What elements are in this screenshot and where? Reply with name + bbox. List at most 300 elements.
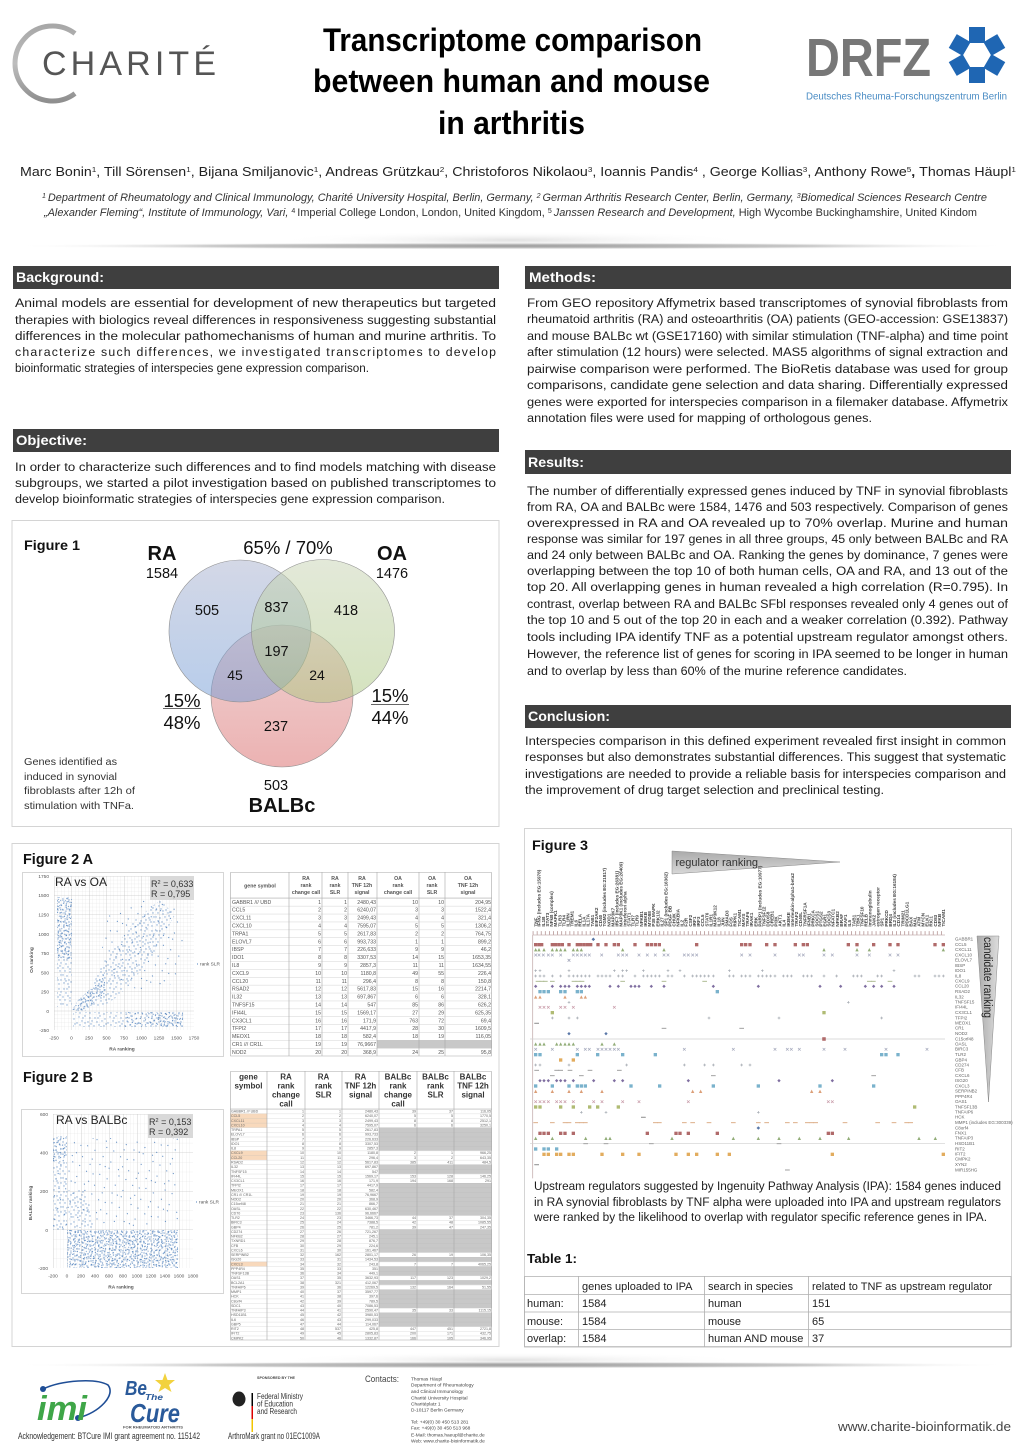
table: figure 2 B: call xyxy=(279,1100,293,1108)
table: figure 2 A: 16 xyxy=(341,1018,347,1024)
table: figure 2 B: 484,5 xyxy=(482,1160,491,1164)
logo: DRFZ: DRFZ xyxy=(806,28,931,88)
table: figure 2 B: 321 xyxy=(335,1281,341,1285)
table: figure 2 A: 3 xyxy=(344,916,347,922)
table: figure 2 B: 11 xyxy=(337,1156,341,1160)
table: figure 2 B: BIRC3 xyxy=(231,1221,242,1225)
text block: results: response was similar for 197 genes in all three groups, 45 only between BALBc and RA xyxy=(527,532,1009,546)
table: figure 2 B: 18 xyxy=(337,1188,341,1192)
table: figure 2 A: 7595,07 xyxy=(357,924,376,930)
table: figure 2 A: 18 xyxy=(341,1034,347,1040)
chart: RA vs OA scatter xyxy=(22,872,224,1056)
table: figure 2 B: 368,9 xyxy=(369,1198,378,1202)
regulator labels: RELB xyxy=(863,913,868,927)
table: figure 2 A: 8 xyxy=(415,979,418,985)
table: figure 2 A: 697,867 xyxy=(357,995,376,1001)
label: RA vs BALBc: RA vs BALBc xyxy=(56,1113,127,1127)
icon: DRFZ blue star xyxy=(949,27,1005,83)
table: figure 2 A: rank xyxy=(301,883,312,889)
table: figure 2 B: 2590,47 xyxy=(365,1309,378,1313)
table: figure 2 B: 48 xyxy=(300,1327,304,1331)
table: figure 2 B: change xyxy=(384,1090,413,1100)
table: figure 2 A: signal xyxy=(460,890,476,896)
table: figure 2 A: 116,05 xyxy=(476,1034,491,1040)
authors: 3 xyxy=(803,165,807,174)
table: figure 2 A: 14 xyxy=(341,1002,347,1008)
logo: Federal Ministry of Education and Research: and Research xyxy=(257,1407,297,1416)
table: figure 2 B: 7 xyxy=(414,1262,416,1266)
regulator labels: IL2 (includes EG:16184) xyxy=(892,874,897,927)
text block: results: overlapping between the top 10 of both human cells, OA and RA, and 13 out of the xyxy=(527,564,1008,578)
regulator labels: PARP1 (includes EG:10977) xyxy=(757,865,762,927)
table: figure 2 A: 1306,2 xyxy=(475,924,491,930)
table: figure 2 A: change call xyxy=(384,890,413,896)
arrow: candidate ranking xyxy=(977,936,999,1102)
table: figure 2 A: RA xyxy=(302,876,310,882)
table: figure 2 B: 171 xyxy=(447,1332,453,1336)
venn labels: 24 xyxy=(309,667,325,683)
table: figure 2 A: GABBR1 /// UBD xyxy=(232,900,271,906)
table: figure 2 B: 19 xyxy=(300,1193,304,1197)
regulator labels: MAP3K7 xyxy=(610,907,615,927)
table: figure 2 A: 9 xyxy=(318,963,321,969)
table: figure 2 A: CR1 /// CR1L xyxy=(232,1042,263,1048)
heading: objective: Objective: xyxy=(16,433,87,448)
table: figure 2 A: 18 xyxy=(315,1034,321,1040)
regulator labels: IL1R1 xyxy=(708,914,713,927)
table: figure 2 A: 14 xyxy=(412,955,418,961)
regulator labels: IFNG (includes EG:15978) xyxy=(537,869,542,927)
table: figure 2 B: 146,25 xyxy=(480,1174,491,1178)
table: figure 2 B: OASL xyxy=(231,1207,241,1211)
candidate gene labels: TNFAIP3 xyxy=(955,1136,974,1141)
callout: correlation xyxy=(150,876,194,900)
table: figure 2 B: 19 xyxy=(337,1193,341,1197)
table: figure 2 B: rank xyxy=(278,1082,295,1090)
table: figure 2 B: NOD2 xyxy=(231,1198,241,1202)
authors: , Anthony Rowe xyxy=(807,164,907,179)
regulator labels: IL1RN xyxy=(565,913,570,927)
table: figure 2 B: 28 xyxy=(337,1239,341,1243)
table: figure 2 B: CXCL10 xyxy=(231,1124,245,1128)
text block: background xyxy=(15,296,496,375)
table: figure 2 B: 22 xyxy=(337,1207,341,1211)
table: figure 2 A: 899,2 xyxy=(478,939,491,945)
table: figure 2 A: 3 xyxy=(441,908,444,914)
table: figure 2 B: 23 xyxy=(337,1216,341,1220)
table: figure 2 B: 40 xyxy=(337,1304,341,1308)
axis labels: 1400 xyxy=(160,1274,171,1280)
table: figure 2 B: 200 xyxy=(410,1332,416,1336)
table: figure 2 A: 72 xyxy=(438,1018,444,1024)
table 1: mouse: xyxy=(527,1316,563,1328)
table: figure 2 B: 385 xyxy=(410,1160,416,1164)
table: figure 2 B: 39 xyxy=(337,1299,341,1303)
table: figure 2 A: 12 xyxy=(341,987,347,993)
table: figure 2 A: 4 xyxy=(415,916,418,922)
table: figure 2 B: 117 xyxy=(410,1276,416,1280)
heading: background: Background: xyxy=(16,270,104,285)
venn labels: 1584 xyxy=(146,566,178,582)
affiliations: Biomedical Sciences Research Centre xyxy=(801,192,987,204)
chart: regulator by candidate matrix xyxy=(530,862,1013,1178)
table 1: 65 xyxy=(812,1316,824,1328)
table: figure 2 B: 24 xyxy=(300,1216,304,1220)
panel: conclusion xyxy=(525,705,1011,797)
caption: figure 3: Upstream regulators suggested by Ingenuity Pathway Analysis (IPA): 1584 genes induced xyxy=(534,1179,1001,1193)
heading: figure 2 A: Figure 2 A xyxy=(23,851,93,868)
regulator labels: MAVS xyxy=(741,914,746,927)
table: figure 2 B: 27 xyxy=(337,1234,341,1238)
affiliations: 3 xyxy=(797,193,801,200)
table: figure 2 B: 1029,2 xyxy=(480,1276,491,1280)
table: figure 2 B: 47 xyxy=(449,1225,453,1229)
regulator labels: IL6 xyxy=(574,920,579,927)
regulator labels: TICAM1 xyxy=(737,909,742,927)
table: figure 2 A: NOD2 xyxy=(232,1050,247,1056)
table: figure 2 B: 76,9667 xyxy=(365,1193,378,1197)
regulator labels: TRIM21 xyxy=(900,910,905,927)
axis labels: 250 xyxy=(41,990,49,996)
regulator labels: NFKB2 xyxy=(835,911,840,927)
table: figure 2 B: C8orf4 xyxy=(231,1299,242,1303)
text block: background: bioinformatic strategies of interspecies gene expression comparison. xyxy=(15,361,369,375)
candidate gene labels: CMPK2 xyxy=(955,1157,971,1162)
candidate gene labels: IFIT2 xyxy=(955,1152,966,1157)
table: figure 2 A: 15 xyxy=(315,1010,321,1016)
axis labels: 1000 xyxy=(132,1274,143,1280)
candidate gene labels: CCL5 xyxy=(955,942,967,947)
table: figure 2 B: 33 xyxy=(337,1267,341,1271)
table: figure 2 B: 6 xyxy=(339,1133,341,1137)
table: figure 2 B: signal xyxy=(349,1090,372,1100)
table 1: 1584 xyxy=(582,1333,606,1345)
table: figure 2 B: 14 xyxy=(337,1170,341,1174)
table: figure 2 B: 25 xyxy=(300,1221,304,1225)
table: figure 2 A: 1569,17 xyxy=(357,1010,376,1016)
table: figure 2 A: 11 xyxy=(439,963,444,969)
table: figure 2 B: 39 xyxy=(300,1285,304,1289)
regulator labels: TBK1 xyxy=(855,914,860,927)
regulator labels: TREM1 xyxy=(569,910,574,927)
table: figure 2 B: 24 xyxy=(337,1221,341,1225)
regulator labels: P38 MAPK xyxy=(651,903,656,927)
regulator labels: CCL5 xyxy=(700,914,705,927)
affiliations: High Wycombe Buckinghamshire, United Kindom xyxy=(739,207,977,219)
venn labels: 44% xyxy=(371,707,409,728)
text: acknowledgement: Acknowledgement: BTCure IMI grant agreement no. 115142 xyxy=(18,1431,200,1441)
regulator labels: TNFSF10 xyxy=(859,906,864,927)
table: figure 2 A: 3 xyxy=(318,916,321,922)
table: figure 2 A: 993,733 xyxy=(357,939,376,945)
table: figure 2 B: 48 xyxy=(449,1221,453,1225)
heading: figure 2 B: Figure 2 B xyxy=(23,1069,93,1086)
table: figure 2 B: CXCL9 xyxy=(231,1151,243,1155)
table: figure 2 A: 4 xyxy=(344,924,347,930)
table: figure 2 B: 2480,43 xyxy=(365,1110,378,1114)
regulator labels: PI3K xyxy=(774,916,779,927)
axis labels xyxy=(29,874,221,1052)
heading: methods xyxy=(525,266,1011,289)
authors: 4 xyxy=(693,165,698,174)
table: figure 2 A: TNF 12h xyxy=(458,883,478,889)
table: figure 2 B: 397,6 xyxy=(369,1295,378,1299)
regulator labels: JAK2 xyxy=(872,914,877,927)
axis labels: rank SLR xyxy=(200,962,221,968)
table: figure 2 B: 2801,17 xyxy=(365,1253,378,1257)
table: figure 2 B: 11 xyxy=(300,1156,304,1160)
text: contacts: Charité University Hospital xyxy=(411,1396,468,1402)
table: figure 2 B: 106,35 xyxy=(480,1253,491,1257)
regulator labels: MAP3K12 xyxy=(712,905,717,927)
venn labels: 837 xyxy=(264,600,289,616)
text: contacts: Thomas Häupl xyxy=(411,1376,442,1382)
text block: objective: develop bioinformatic strategies of interspecies gene expression comparison. xyxy=(15,492,445,506)
table: figure 2 B: 299,033 xyxy=(365,1318,378,1322)
authors: 1 xyxy=(92,165,96,174)
candidate gene labels: MEOX1 xyxy=(955,1021,971,1026)
candidate gene labels: TNFSF13B xyxy=(955,1104,977,1109)
table: figure 2 A: RA xyxy=(331,876,339,882)
table: figure 2 B: 245,1 xyxy=(369,1234,378,1238)
table: figure 2 B: 291 xyxy=(485,1179,491,1183)
table: figure 2 A: IL8 xyxy=(232,963,239,969)
table: figure 2 A: 15 xyxy=(341,1010,347,1016)
logo: Charité: CHARITÉ xyxy=(42,45,216,83)
table: figure 2 B: 2 xyxy=(339,1114,341,1118)
arrow: regulator ranking xyxy=(672,851,840,874)
affiliations: 2 xyxy=(536,193,543,200)
table: figure 2 B: TFPI2 xyxy=(231,1184,241,1188)
callout: correlation: = 0,153 xyxy=(159,1117,191,1127)
table: figure 2 A: 1634,55 xyxy=(472,963,491,969)
table: figure 2 B: CCL5 xyxy=(231,1114,240,1118)
candidate gene labels: CX3CL1 xyxy=(955,1010,972,1015)
candidate gene labels: IDO1 xyxy=(955,968,966,973)
regulator labels: IL18 xyxy=(716,917,721,927)
table: figure 2 B: RA xyxy=(280,1072,292,1082)
axis labels: rank SLR xyxy=(199,1200,220,1206)
table: figure 2 B: 132 xyxy=(410,1285,416,1289)
table: figure 2 B: 35 xyxy=(337,1276,341,1280)
candidate gene labels: CXCL3 xyxy=(955,1083,970,1088)
table: figure 2 A: 764,75 xyxy=(475,931,491,937)
regulator labels: SP1 xyxy=(880,917,885,927)
table: figure 2 B: TLR2 xyxy=(231,1216,240,1220)
table: figure 2 B: 1332,87 xyxy=(365,1336,378,1340)
table: figure 2 A: 25 xyxy=(438,1050,444,1056)
candidate gene labels: TNFSF15 xyxy=(955,1000,975,1005)
table: figure 2 B: 32 xyxy=(337,1262,341,1266)
table: figure 2 B: 43 xyxy=(337,1318,341,1322)
table: figure 2 A: OA xyxy=(464,876,472,882)
axis labels: -200 xyxy=(48,1274,58,1280)
regulator labels: TAB1 xyxy=(590,914,595,927)
axis labels: 200 xyxy=(40,1189,48,1195)
text block: conclusion: Interspecies comparison in this defined experiment revealed first insight in common xyxy=(525,734,1006,748)
axis labels: 600 xyxy=(105,1274,113,1280)
table: figure 2 A: 7 xyxy=(344,947,347,953)
regulator labels: IL2 xyxy=(680,920,685,927)
text block: background: therapies with biologics reveal differences in responsiveness suggesting substantial xyxy=(15,313,496,327)
table: figure 2 B: 8 xyxy=(339,1142,341,1146)
regulator labels: TLR3 xyxy=(557,915,562,927)
table: figure 2 B: 243,8 xyxy=(369,1262,378,1266)
table: figure 2 B: RSAD2 xyxy=(231,1160,243,1164)
candidate gene labels: HSD11B1 xyxy=(955,1141,975,1146)
regulator labels: IL1B xyxy=(541,916,546,927)
table: figure 2 A: 20 xyxy=(315,1050,321,1056)
venn labels: 15% xyxy=(371,685,409,706)
table: figure 2 B: 9 xyxy=(302,1147,304,1151)
candidate gene labels: NOD2 xyxy=(955,1031,968,1036)
caption: figure 3: were ranked by the likelihood to overlap with regulator specific reference genes in IPA. xyxy=(533,1210,987,1224)
table: figure 2 A: OA xyxy=(394,876,402,882)
regulator labels: Interferon alpha xyxy=(623,891,628,927)
panel: methods xyxy=(525,266,1011,425)
table: figure 2 A: 15 xyxy=(412,987,418,993)
text block: results: tools including IPA identify TNF as a potential upstream regulator amongst others. xyxy=(527,630,1008,644)
table: figure 2 A: 547 xyxy=(367,1002,376,1008)
text: contacts xyxy=(365,1374,485,1444)
table: figure 2 B: 27 xyxy=(300,1230,304,1234)
regulator labels: SP1 (includes EG:16362) xyxy=(663,872,668,927)
table: figure 2 B: 2512,1 xyxy=(480,1119,491,1123)
candidate gene labels: C8orf4 xyxy=(955,1125,969,1130)
table: figure 2 B: BCL2A1 xyxy=(231,1281,244,1285)
text: contacts: Department of Rheumatology xyxy=(411,1382,474,1388)
table: figure 2 A: 27 xyxy=(412,1010,418,1016)
regulator labels: MAP3K1 (includes EG:26409) xyxy=(618,862,623,927)
table: figure 2 B: 42 xyxy=(300,1299,304,1303)
regulator labels: IRF1 xyxy=(692,916,697,927)
table: figure 2 B: change xyxy=(272,1090,301,1100)
regulator labels: SMAD3 xyxy=(725,910,730,927)
regulator labels: BAX xyxy=(908,916,913,927)
table: figure 2 B: 37 xyxy=(300,1276,304,1280)
table: figure 2 B: 136 xyxy=(335,1211,341,1215)
candidate gene labels: OASL xyxy=(955,1041,967,1046)
text: ArthroMark grant: ArthroMark grant no 01EC1009A xyxy=(228,1431,320,1441)
table: figure 2 B: CXCL11 xyxy=(231,1119,244,1123)
table: figure 2 B: 411 xyxy=(447,1160,453,1164)
table: figure 2 B: 29 xyxy=(337,1244,341,1248)
table: figure 2 A: 17 xyxy=(341,1026,347,1032)
table: figure 2 A: 2857,3 xyxy=(360,963,376,969)
regulator labels: PRKCD xyxy=(884,909,889,927)
candidate gene labels: CFB xyxy=(955,1068,964,1073)
axis labels: 1750 xyxy=(189,1036,200,1042)
table: figure 2 A: 1 xyxy=(441,939,444,945)
table: figure 2 A: 13 xyxy=(341,995,347,1001)
table: figure 2 B: 2 xyxy=(302,1114,304,1118)
regulator labels: IRF7 (includes EG:26381) xyxy=(614,870,619,927)
table: figure 2 A: 171,9 xyxy=(363,1018,376,1024)
table: figure 2 A: 17 xyxy=(315,1026,321,1032)
table: figure 2 B: 50 xyxy=(300,1336,304,1340)
text block: results: The number of differentially expressed genes induced by TNF in synovial fibroblasts xyxy=(527,484,1008,498)
callout: correlation xyxy=(148,1114,193,1138)
text block: results: top 20. All overlapping genes in human revealed a high correlation (R=0.795). In xyxy=(527,580,1008,594)
venn labels: BALBc xyxy=(249,795,315,817)
axis labels: 1200 xyxy=(146,1274,157,1280)
table: figure 2 B: 28 xyxy=(300,1234,304,1238)
heading: table 1: Table 1: xyxy=(527,1251,577,1266)
table: figure 2 B: 35 xyxy=(412,1309,416,1313)
text: contacts: E-Mail: thomas.haeupl@charite.de xyxy=(411,1432,485,1438)
table: figure 2 B: TNFAIP3 xyxy=(231,1309,246,1313)
table: figure 2 A: 368,9 xyxy=(363,1050,376,1056)
candidate gene labels xyxy=(955,937,1013,1172)
table: figure 2 A: IBSP xyxy=(232,947,244,953)
table: figure 2 A: 55 xyxy=(438,971,444,977)
table: figure 2 A xyxy=(230,872,492,1056)
text block: methods: pairwise comparison were performed. The BioRetis database was used for group xyxy=(527,362,1008,376)
table: figure 2 B: 4417,9 xyxy=(367,1184,378,1188)
regulator labels: NFKB xyxy=(937,913,942,927)
regulator labels: RAF1 xyxy=(843,914,848,927)
text block: results: However, the reference list of genes for scoring in IPA seemed to be longer in human xyxy=(527,647,1008,661)
logo: Charité xyxy=(15,26,216,101)
table: figure 2 B: 23 xyxy=(300,1211,304,1215)
regulator labels: STAT1 xyxy=(627,912,632,927)
table: figure 2 B: 5 xyxy=(339,1128,341,1132)
candidate gene labels: MIR155HG xyxy=(955,1167,978,1172)
table: figure 2 A: 2480,43 xyxy=(357,900,376,906)
table: figure 2 A: 5617,83 xyxy=(357,987,376,993)
table: figure 2 B: 6 xyxy=(451,1124,453,1128)
callout: correlation: R xyxy=(149,1117,156,1127)
table: figure 2 B: 40 xyxy=(300,1290,304,1294)
table: figure 2 B: 447 xyxy=(410,1327,416,1331)
table: figure 2 A: 321,4 xyxy=(478,916,491,922)
table: figure 2 B: 547 xyxy=(372,1170,378,1174)
table: figure 2 B: 36 xyxy=(337,1285,341,1289)
table: figure 2 B: 866,7 xyxy=(369,1202,378,1206)
authors: , Andreas Grützkau xyxy=(318,164,440,179)
table: figure 2 A: 9 xyxy=(415,947,418,953)
regulator labels: TLR9 xyxy=(635,915,640,927)
table: figure 2 A: ELOVL7 xyxy=(232,939,252,945)
table: figure 2 B: SLR xyxy=(428,1090,444,1100)
table: figure 2 B: 1434,53 xyxy=(365,1258,378,1262)
table: figure 2 A: 6 xyxy=(344,939,347,945)
candidate gene labels: IBSP xyxy=(955,963,965,968)
table: figure 2 A: 28 xyxy=(412,1026,418,1032)
regulator labels: NFkB (complex) xyxy=(549,891,554,927)
venn labels xyxy=(146,537,409,817)
table: figure 2 B: 162 xyxy=(335,1253,341,1257)
venn labels: 1476 xyxy=(376,566,408,582)
table: figure 2 A: 1653,35 xyxy=(472,955,491,961)
table: figure 2 B: 33 xyxy=(300,1258,304,1262)
logo: Federal Ministry of Education and Research: SPONSORED BY THE xyxy=(257,1375,295,1380)
regulator labels: CHUK xyxy=(672,913,677,927)
table: figure 2 B: 993,733 xyxy=(365,1133,378,1137)
affiliations: Janssen Research and Development, xyxy=(553,207,739,219)
table: figure 2 A: 4 xyxy=(441,916,444,922)
chart: RA vs BALBc scatter xyxy=(22,1110,224,1294)
venn labels: 15% xyxy=(163,690,201,711)
table: figure 2 A: 13 xyxy=(315,995,321,1001)
table: figure 2 B: SDC1 xyxy=(231,1304,241,1308)
table: figure 2 B: 41 xyxy=(300,1295,304,1299)
caption: figure 1: Genes identified as xyxy=(24,757,117,768)
table: figure 2 A: 16 xyxy=(438,987,444,993)
table: figure 2 A: 582,4 xyxy=(363,1034,376,1040)
regulator labels: MAPK1 xyxy=(553,910,558,927)
regulator labels: RIPK1 xyxy=(733,913,738,927)
